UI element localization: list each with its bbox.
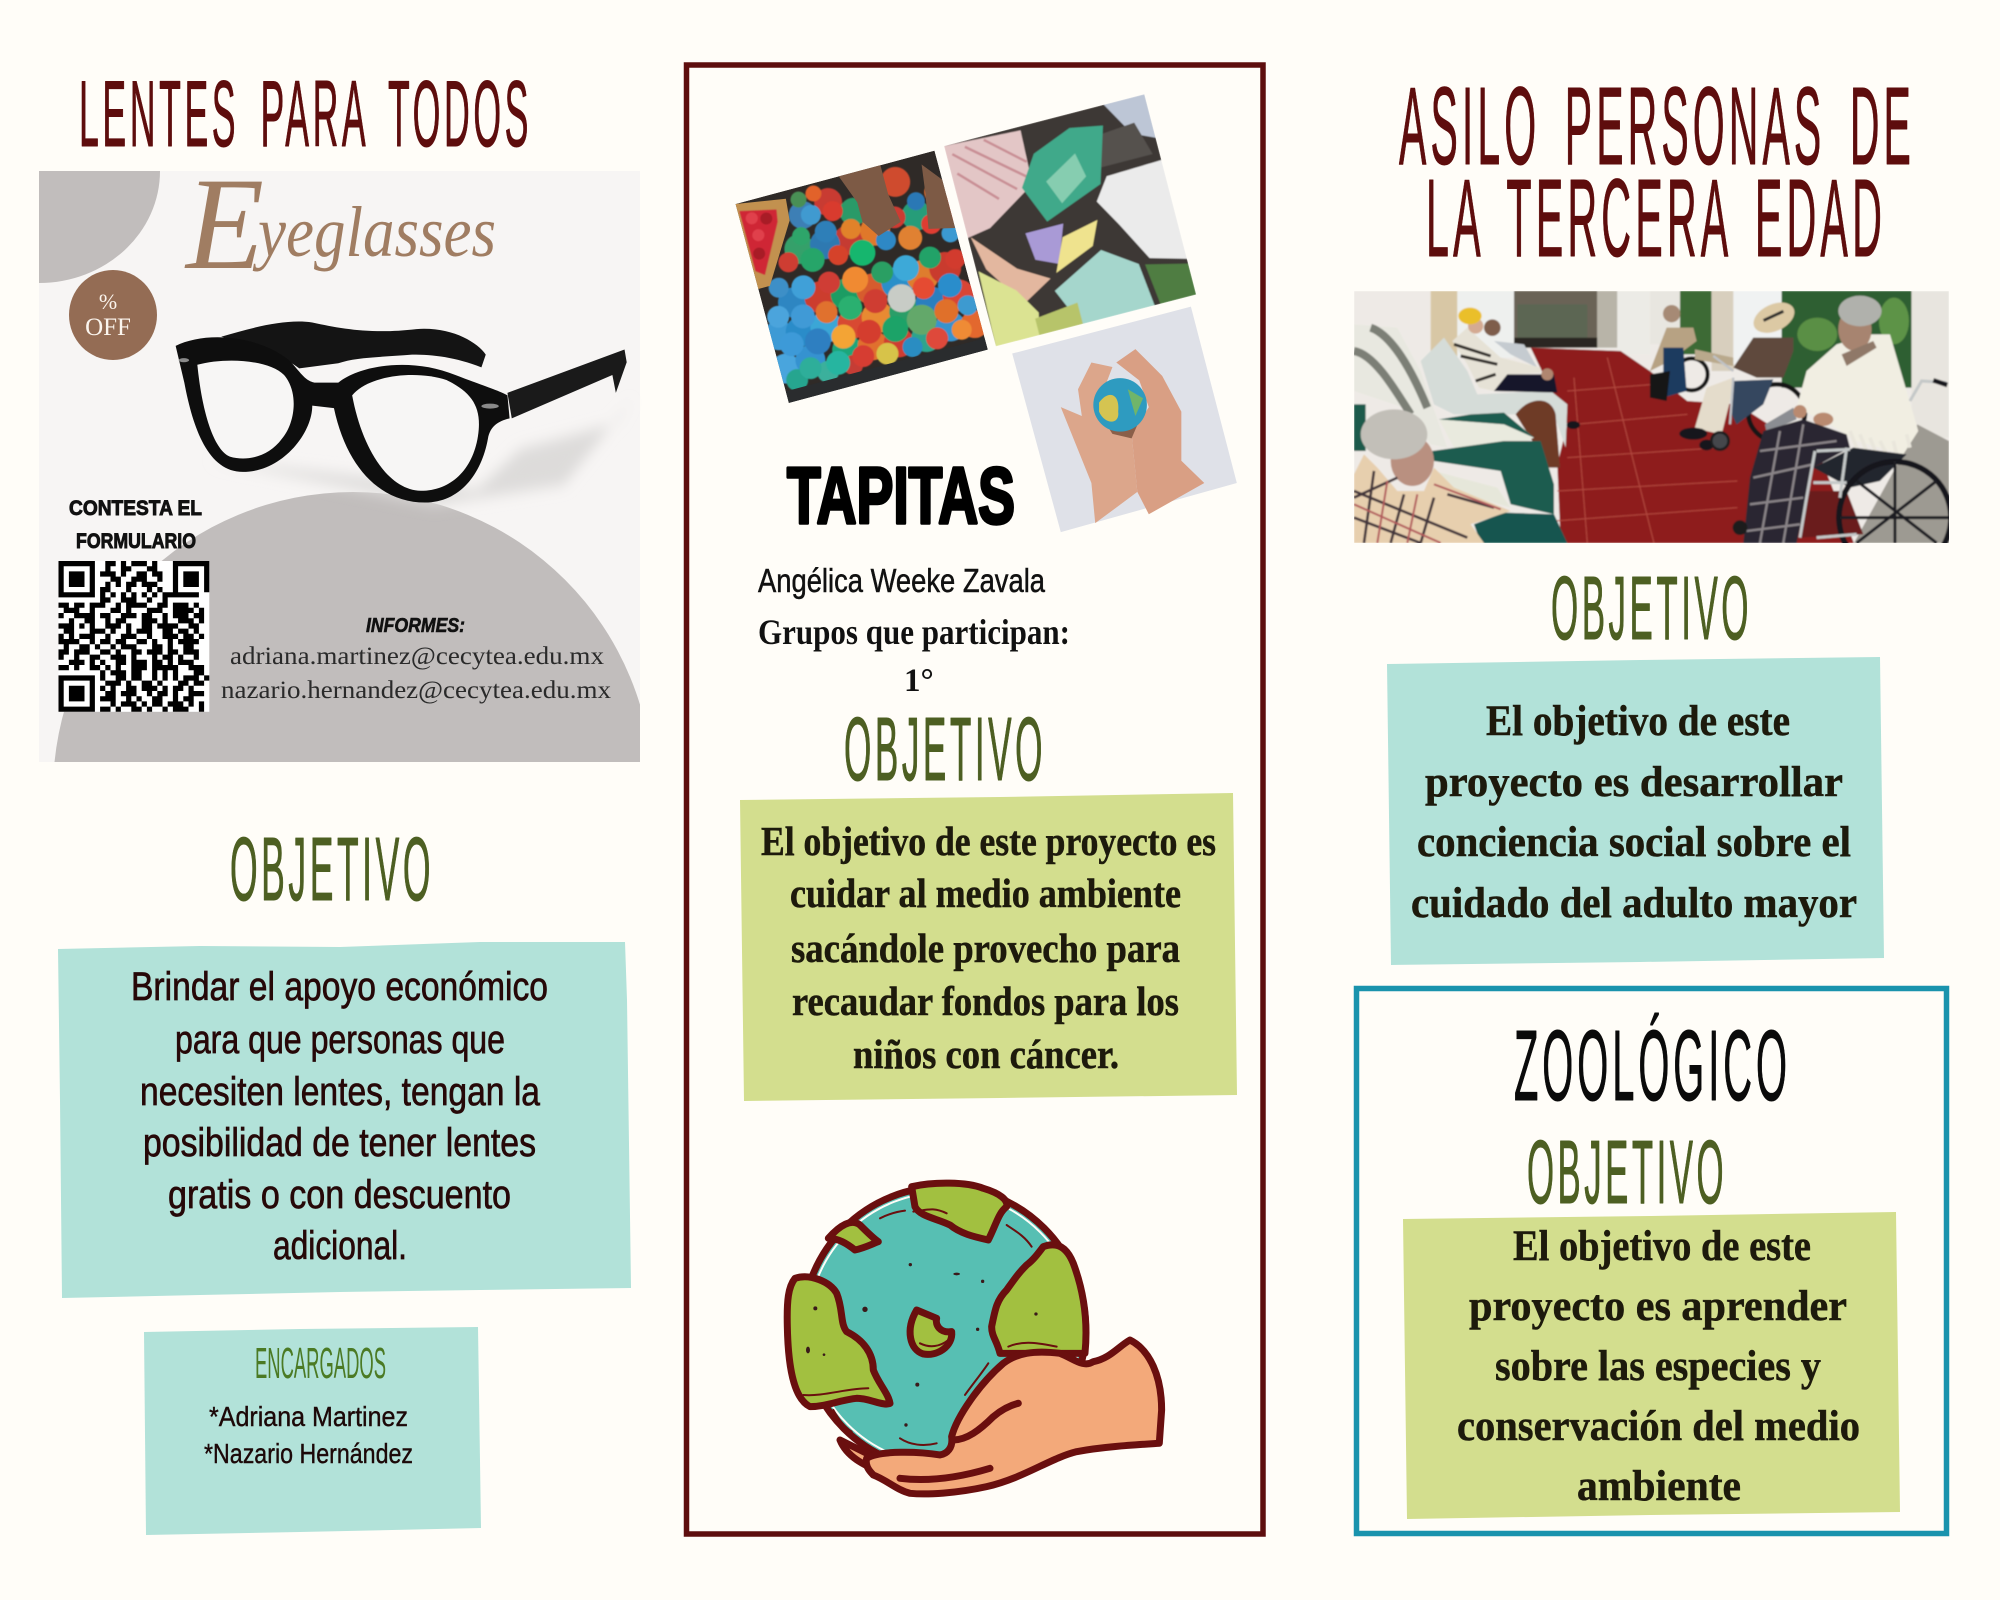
objective box zoo: conservación del medio	[1457, 1403, 1860, 1450]
objective box left: posibilidad de tener lentes	[143, 1121, 536, 1165]
objective box center: recaudar fondos para los	[792, 978, 1179, 1024]
icon: earth in hand	[787, 1183, 1162, 1494]
encargados box: *Adriana Martinez	[209, 1401, 408, 1432]
contact information	[221, 615, 612, 704]
form prompt	[69, 497, 202, 553]
coordinator and groups: 1°	[904, 663, 934, 699]
objective box center: El objetivo de este proyecto es	[761, 818, 1216, 864]
eyeglasses flyer	[39, 171, 640, 762]
discount badge: %	[99, 289, 117, 314]
objective box center: sacándole provecho para	[791, 925, 1180, 971]
objective box zoo: ambiente	[1577, 1463, 1741, 1510]
panel: asilo	[1354, 65, 1951, 965]
objective box center	[740, 793, 1237, 1101]
objective box right: proyecto es desarrollar	[1425, 759, 1843, 806]
objective box left: adicional.	[273, 1224, 407, 1268]
objective box left: Brindar el apoyo económico	[131, 965, 548, 1009]
contact information: INFORMES:	[366, 615, 465, 637]
objective box center: niños con cáncer.	[853, 1031, 1119, 1077]
form prompt: CONTESTA EL	[69, 497, 202, 520]
discount badge	[69, 270, 157, 360]
objective box right: conciencia social sobre el	[1417, 819, 1851, 866]
coordinator and groups	[758, 562, 1070, 699]
objective box zoo: proyecto es aprender	[1469, 1283, 1847, 1330]
panel: zoologico	[1356, 988, 1946, 1534]
encargados box: ENCARGADOS	[255, 1339, 386, 1388]
coordinator and groups: Grupos que participan:	[758, 612, 1070, 652]
panel: lentes para todos: OBJETIVO	[230, 820, 434, 920]
photo: bottle caps	[726, 144, 996, 405]
objective box left: para que personas que	[175, 1018, 505, 1062]
panel: lentes para todos	[0, 59, 653, 1535]
tapitas heading: TAPITAS	[787, 451, 1015, 540]
infographic page: LENTES PARA TODOS	[79, 61, 532, 166]
QR code	[58, 561, 209, 712]
objective box right	[1387, 657, 1884, 965]
contact information: nazario.hernandez@cecytea.edu.mx	[221, 677, 612, 704]
encargados box	[144, 1327, 481, 1535]
panel frame	[1356, 988, 1946, 1534]
flyer script heading: yeglasses	[252, 192, 496, 272]
photo: plastic bags	[944, 94, 1196, 346]
objective box zoo: El objetivo de este	[1513, 1223, 1811, 1270]
panel: tapitas	[686, 65, 1263, 1534]
flyer script heading	[184, 150, 496, 297]
objective box right: El objetivo de este	[1486, 698, 1790, 745]
objective box zoo: sobre las especies y	[1495, 1343, 1821, 1390]
contact information: adriana.martinez@cecytea.edu.mx	[230, 643, 605, 670]
discount badge: OFF	[85, 314, 131, 341]
title: asilo	[1399, 65, 1915, 280]
objective box left	[58, 942, 631, 1298]
form prompt: FORMULARIO	[76, 530, 196, 553]
objective box left: gratis o con descuento	[168, 1173, 511, 1217]
encargados box: *Nazario Hernández	[204, 1438, 413, 1469]
glasses illustration	[176, 322, 633, 505]
panel frame	[686, 65, 1263, 1534]
objective box center: cuidar al medio ambiente	[790, 870, 1181, 916]
objective box right: cuidado del adulto mayor	[1411, 880, 1857, 927]
photo: hands holding globe	[1012, 307, 1237, 532]
panel: tapitas: OBJETIVO	[844, 700, 1046, 800]
coordinator and groups: Angélica Weeke Zavala	[758, 562, 1046, 599]
photo: elderly residents	[1354, 291, 1949, 543]
objective box left: necesiten lentes, tengan la	[140, 1070, 541, 1114]
flyer script heading: E	[184, 150, 264, 297]
objective box zoo	[1403, 1212, 1900, 1519]
